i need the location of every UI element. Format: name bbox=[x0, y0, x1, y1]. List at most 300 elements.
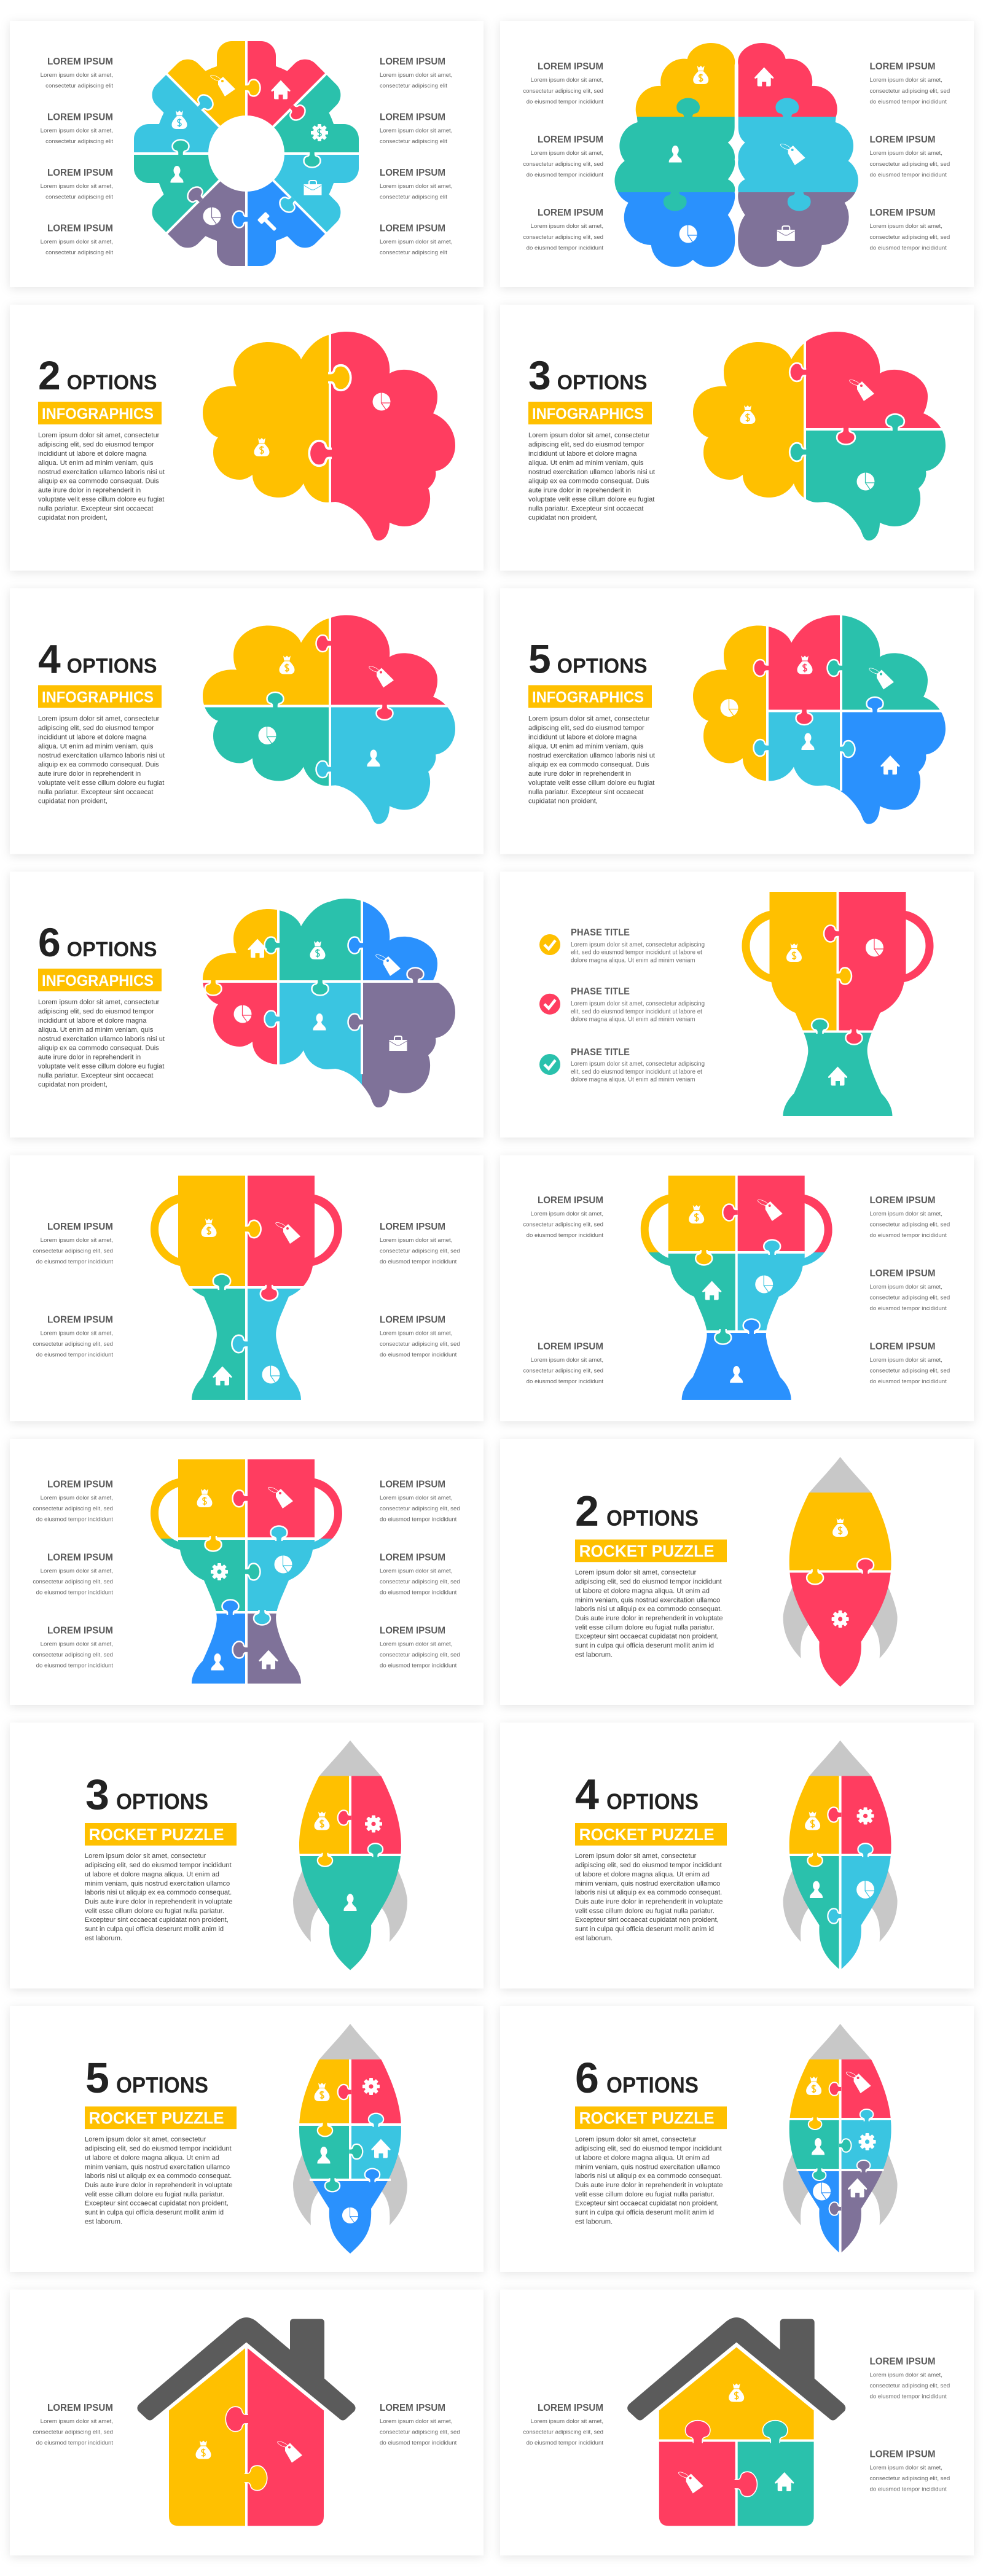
house diagram bbox=[627, 2317, 845, 2529]
left text column: LOREM IPSUM bbox=[538, 208, 603, 218]
left text column: consectetur adipiscing elit, sed bbox=[33, 1652, 113, 1658]
left text column: do eiusmod tempor incididunt bbox=[527, 1378, 603, 1385]
body text: velit esse cillum dolore eu fugiat nulla pariatur. bbox=[575, 1624, 715, 1631]
body text: adipiscing elit, sed do eiusmod tempor bbox=[528, 725, 644, 732]
trophy diagram bbox=[148, 1174, 345, 1404]
brain diagram bbox=[614, 43, 858, 267]
body text: aliqua. Ut enim ad minim veniam, quis bbox=[528, 459, 644, 467]
left text column: consectetur adipiscing elit bbox=[45, 138, 113, 145]
body text: Lorem ipsum dolor sit amet, consectetur bbox=[85, 2136, 206, 2144]
body text: nostrud exercitation ullamco laboris nisi ut bbox=[38, 752, 165, 759]
right text column: LOREM IPSUM bbox=[870, 208, 935, 218]
panel: two room house bbox=[10, 2290, 484, 2555]
left text column bbox=[523, 1195, 603, 1385]
left text column: LOREM IPSUM bbox=[538, 1195, 603, 1206]
body text: aute irure dolor in reprehenderit in bbox=[38, 486, 141, 494]
body text: minim veniam, quis nostrud exercitation ullamco bbox=[575, 1596, 720, 1604]
body text: nostrud exercitation ullamco laboris nisi ut bbox=[528, 752, 655, 759]
left text column: LOREM IPSUM bbox=[47, 168, 113, 178]
right text column: consectetur adipiscing elit bbox=[380, 83, 447, 90]
body text: est laborum. bbox=[85, 2218, 122, 2225]
right text column: consectetur adipiscing elit, sed bbox=[870, 234, 950, 241]
body text: aliquip ex ea commodo consequat. Duis bbox=[38, 478, 159, 485]
title: OPTIONS bbox=[67, 371, 157, 394]
phase three: dolore magna aliqua. Ut enim ad minim veniam bbox=[571, 1076, 695, 1083]
body text: laboris nisi ut aliquip ex ea commodo consequat. bbox=[575, 2172, 722, 2180]
right text blocks: do eiusmod tempor incididunt bbox=[870, 2393, 947, 2400]
brain diagram bbox=[194, 890, 466, 1117]
title: 6 bbox=[38, 919, 61, 965]
left text column: Lorem ipsum dolor sit amet, bbox=[531, 77, 603, 84]
body text: aliquip ex ea commodo consequat. Duis bbox=[528, 761, 649, 768]
title bbox=[528, 636, 648, 682]
card background bbox=[500, 2006, 974, 2272]
body text: adipiscing elit, sed do eiusmod tempor incididunt bbox=[575, 2145, 722, 2152]
left text column: do eiusmod tempor incididunt bbox=[527, 244, 603, 252]
body text: adipiscing elit, sed do eiusmod tempor bbox=[38, 1008, 154, 1015]
body text: aliquip ex ea commodo consequat. Duis bbox=[38, 1044, 159, 1052]
title bbox=[85, 2054, 208, 2102]
body text: adipiscing elit, sed do eiusmod tempor incididunt bbox=[85, 2145, 232, 2152]
body text: adipiscing elit, sed do eiusmod tempor incididunt bbox=[575, 1579, 722, 1586]
title: OPTIONS bbox=[557, 371, 648, 394]
body text: nulla pariatur. Excepteur sint occaecat bbox=[38, 1072, 153, 1080]
body text: nulla pariatur. Excepteur sint occaecat bbox=[528, 789, 643, 796]
body text: Duis aute irure dolor in reprehenderit in voluptate bbox=[85, 1898, 233, 1905]
right text column: do eiusmod tempor incididunt bbox=[870, 1305, 947, 1312]
left text column: LOREM IPSUM bbox=[47, 224, 113, 233]
left text block: do eiusmod tempor incididunt bbox=[36, 2440, 113, 2446]
right text column: Lorem ipsum dolor sit amet, bbox=[380, 127, 452, 134]
left text column: do eiusmod tempor incididunt bbox=[527, 1232, 603, 1239]
title bbox=[38, 919, 157, 965]
title: 4 bbox=[575, 1770, 599, 1818]
brain diagram bbox=[203, 615, 455, 824]
right text column: do eiusmod tempor incididunt bbox=[870, 172, 947, 178]
phase two: PHASE TITLE bbox=[571, 986, 630, 997]
title: OPTIONS bbox=[606, 1505, 699, 1531]
body text: aute irure dolor in reprehenderit in bbox=[38, 770, 141, 778]
body text: velit esse cillum dolore eu fugiat nulla pariatur. bbox=[575, 2191, 715, 2198]
left text block: LOREM IPSUM bbox=[538, 2403, 603, 2413]
left text column: consectetur adipiscing elit, sed bbox=[33, 1248, 113, 1255]
right text column: LOREM IPSUM bbox=[380, 1553, 445, 1563]
left text column: LOREM IPSUM bbox=[538, 1341, 603, 1352]
left text column: LOREM IPSUM bbox=[47, 1625, 113, 1636]
card background bbox=[10, 872, 484, 1138]
left text column: do eiusmod tempor incididunt bbox=[36, 1590, 113, 1596]
banner: ROCKET PUZZLE bbox=[89, 1825, 224, 1844]
right text column: consectetur adipiscing elit, sed bbox=[870, 88, 950, 95]
body text: aliqua. Ut enim ad minim veniam, quis bbox=[38, 743, 154, 751]
left text column: consectetur adipiscing elit, sed bbox=[523, 88, 603, 95]
right text blocks: consectetur adipiscing elit, sed bbox=[870, 2383, 950, 2389]
phase three: elit, sed do eiusmod tempor incididunt ut labore et bbox=[571, 1069, 702, 1075]
title: OPTIONS bbox=[67, 938, 157, 961]
banner: INFOGRAPHICS bbox=[42, 689, 154, 706]
right text column: do eiusmod tempor incididunt bbox=[380, 1590, 457, 1596]
left text column: Lorem ipsum dolor sit amet, bbox=[41, 238, 113, 246]
left text column: LOREM IPSUM bbox=[47, 1480, 113, 1490]
right text column: consectetur adipiscing elit, sed bbox=[380, 1248, 460, 1255]
body text bbox=[38, 432, 165, 521]
body text: Lorem ipsum dolor sit amet, consectetur bbox=[528, 432, 650, 439]
body text: Duis aute irure dolor in reprehenderit in voluptate bbox=[85, 2182, 233, 2189]
body text: nostrud exercitation ullamco laboris nisi ut bbox=[38, 1036, 165, 1043]
body text: cupidatat non proident, bbox=[528, 797, 598, 805]
left text column: Lorem ipsum dolor sit amet, bbox=[41, 72, 113, 79]
title: 5 bbox=[85, 2054, 109, 2102]
right text blocks: consectetur adipiscing elit, sed bbox=[870, 2475, 950, 2482]
right text column: do eiusmod tempor incididunt bbox=[870, 1232, 947, 1239]
left text column: do eiusmod tempor incididunt bbox=[36, 1662, 113, 1669]
title: 6 bbox=[575, 2054, 599, 2102]
left text column: consectetur adipiscing elit, sed bbox=[33, 1505, 113, 1512]
right text column: LOREM IPSUM bbox=[380, 112, 445, 122]
card background bbox=[500, 2290, 974, 2555]
panel: 3 options brain bbox=[500, 305, 974, 571]
banner: ROCKET PUZZLE bbox=[579, 2109, 715, 2128]
right text column: Lorem ipsum dolor sit amet, bbox=[870, 1284, 942, 1290]
right text block: LOREM IPSUM bbox=[380, 2403, 445, 2413]
right text column: Lorem ipsum dolor sit amet, bbox=[380, 1641, 452, 1647]
left text column: LOREM IPSUM bbox=[47, 1553, 113, 1563]
right text column: LOREM IPSUM bbox=[870, 1195, 935, 1206]
body text: Lorem ipsum dolor sit amet, consectetur bbox=[85, 1852, 206, 1860]
body text: ut labore et dolore magna aliqua. Ut enim ad bbox=[575, 1871, 710, 1878]
right text column: do eiusmod tempor incididunt bbox=[380, 1662, 457, 1669]
right text column: consectetur adipiscing elit, sed bbox=[870, 1367, 950, 1375]
title: OPTIONS bbox=[67, 655, 157, 678]
title: 2 bbox=[575, 1487, 599, 1535]
panel: 5 options brain bbox=[500, 588, 974, 854]
body text: adipiscing elit, sed do eiusmod tempor bbox=[38, 725, 154, 732]
body text: minim veniam, quis nostrud exercitation ullamco bbox=[85, 1880, 230, 1887]
banner: INFOGRAPHICS bbox=[532, 405, 644, 423]
right text column: do eiusmod tempor incididunt bbox=[870, 244, 947, 252]
left text column: LOREM IPSUM bbox=[47, 57, 113, 67]
left text column: do eiusmod tempor incididunt bbox=[36, 1516, 113, 1523]
right text column bbox=[380, 1222, 460, 1359]
title: 3 bbox=[528, 353, 551, 398]
right text column: LOREM IPSUM bbox=[870, 1341, 935, 1352]
left text block: LOREM IPSUM bbox=[47, 2403, 113, 2413]
phase two bbox=[539, 986, 705, 1023]
body text: nulla pariatur. Excepteur sint occaecat bbox=[38, 789, 153, 796]
right text column: consectetur adipiscing elit, sed bbox=[380, 1579, 460, 1585]
body text: incididunt ut labore et dolore magna bbox=[38, 733, 147, 741]
body text: nulla pariatur. Excepteur sint occaecat bbox=[528, 505, 643, 512]
left text column bbox=[41, 57, 113, 256]
body text: Lorem ipsum dolor sit amet, consectetur bbox=[575, 2136, 697, 2144]
left text column: LOREM IPSUM bbox=[47, 112, 113, 122]
right text column: LOREM IPSUM bbox=[380, 1222, 445, 1232]
right text column bbox=[870, 1195, 950, 1385]
body text: Excepteur sint occaecat cupidatat non proident, bbox=[575, 1916, 719, 1924]
right text column: consectetur adipiscing elit, sed bbox=[380, 1505, 460, 1512]
left text block: Lorem ipsum dolor sit amet, bbox=[531, 2418, 603, 2425]
left text column: Lorem ipsum dolor sit amet, bbox=[41, 183, 113, 190]
trophy diagram bbox=[148, 1458, 345, 1688]
left text column: do eiusmod tempor incididunt bbox=[36, 1259, 113, 1265]
left text block: Lorem ipsum dolor sit amet, bbox=[41, 2418, 113, 2425]
left text block: consectetur adipiscing elit, sed bbox=[523, 2429, 603, 2436]
body text: voluptate velit esse cillum dolore eu fugiat bbox=[528, 496, 654, 504]
body text: aliquip ex ea commodo consequat. Duis bbox=[528, 478, 649, 485]
body text: velit esse cillum dolore eu fugiat nulla pariatur. bbox=[85, 2191, 224, 2198]
body text: aliqua. Ut enim ad minim veniam, quis bbox=[38, 1026, 154, 1034]
body text: adipiscing elit, sed do eiusmod tempor incididunt bbox=[575, 1862, 722, 1869]
body text: sunt in culpa qui officia deserunt mollit anim id bbox=[85, 1926, 224, 1933]
left text column: Lorem ipsum dolor sit amet, bbox=[41, 1641, 113, 1647]
panel: 2 options rocket bbox=[500, 1439, 974, 1705]
body text: laboris nisi ut aliquip ex ea commodo consequat. bbox=[85, 2172, 232, 2180]
left text column: Lorem ipsum dolor sit amet, bbox=[531, 150, 603, 157]
right text column: Lorem ipsum dolor sit amet, bbox=[380, 72, 452, 79]
left text column: Lorem ipsum dolor sit amet, bbox=[531, 1357, 603, 1364]
right text column bbox=[380, 1480, 460, 1669]
right text column: LOREM IPSUM bbox=[870, 1268, 935, 1279]
body text: Excepteur sint occaecat cupidatat non proident, bbox=[85, 1916, 229, 1924]
body text: incididunt ut labore et dolore magna bbox=[528, 733, 637, 741]
left text column: do eiusmod tempor incididunt bbox=[527, 172, 603, 178]
rocket diagram bbox=[783, 2018, 898, 2256]
right text column: Lorem ipsum dolor sit amet, bbox=[870, 1357, 942, 1364]
right text column: Lorem ipsum dolor sit amet, bbox=[870, 150, 942, 157]
panel: three room house bbox=[500, 2290, 974, 2555]
left text column: consectetur adipiscing elit, sed bbox=[523, 1221, 603, 1228]
body text: voluptate velit esse cillum dolore eu fugiat bbox=[528, 779, 654, 787]
left text column bbox=[33, 1222, 113, 1359]
phase three: PHASE TITLE bbox=[571, 1047, 630, 1058]
body text: ut labore et dolore magna aliqua. Ut enim ad bbox=[85, 2154, 219, 2161]
body text: aliqua. Ut enim ad minim veniam, quis bbox=[528, 743, 644, 751]
body text: Duis aute irure dolor in reprehenderit in voluptate bbox=[575, 1615, 723, 1622]
right text column: Lorem ipsum dolor sit amet, bbox=[870, 223, 942, 230]
body text: nostrud exercitation ullamco laboris nisi ut bbox=[38, 469, 165, 476]
left text column: Lorem ipsum dolor sit amet, bbox=[41, 1330, 113, 1337]
body text: voluptate velit esse cillum dolore eu fugiat bbox=[38, 1063, 164, 1070]
title: 2 bbox=[38, 353, 61, 398]
body text: sunt in culpa qui officia deserunt mollit anim id bbox=[575, 2209, 714, 2216]
body text: voluptate velit esse cillum dolore eu fugiat bbox=[38, 496, 164, 504]
right text column: consectetur adipiscing elit, sed bbox=[870, 1221, 950, 1228]
left text column: consectetur adipiscing elit, sed bbox=[523, 161, 603, 168]
body text: incididunt ut labore et dolore magna bbox=[528, 450, 637, 458]
right text column: do eiusmod tempor incididunt bbox=[380, 1516, 457, 1523]
card background bbox=[500, 588, 974, 854]
body text: aute irure dolor in reprehenderit in bbox=[528, 486, 631, 494]
right text column: consectetur adipiscing elit bbox=[380, 249, 447, 256]
banner: INFOGRAPHICS bbox=[42, 972, 154, 989]
body text: aute irure dolor in reprehenderit in bbox=[38, 1054, 141, 1061]
body text: Lorem ipsum dolor sit amet, consectetur bbox=[38, 715, 160, 722]
left text block: consectetur adipiscing elit, sed bbox=[33, 2429, 113, 2436]
card background bbox=[10, 1722, 484, 1989]
card background bbox=[10, 1155, 484, 1421]
right text column: Lorem ipsum dolor sit amet, bbox=[380, 1567, 452, 1575]
left text block bbox=[33, 2403, 113, 2446]
card background bbox=[500, 1722, 974, 1989]
left text column: Lorem ipsum dolor sit amet, bbox=[41, 127, 113, 134]
right text column: LOREM IPSUM bbox=[380, 57, 445, 67]
card background bbox=[500, 1155, 974, 1421]
left text column: do eiusmod tempor incididunt bbox=[36, 1351, 113, 1359]
panel: 2 options brain bbox=[10, 305, 484, 571]
body text bbox=[575, 1852, 723, 1942]
left text column: LOREM IPSUM bbox=[47, 1222, 113, 1232]
left text column: consectetur adipiscing elit, sed bbox=[523, 1367, 603, 1375]
card background bbox=[10, 21, 484, 287]
rocket diagram bbox=[293, 1735, 407, 1974]
banner: ROCKET PUZZLE bbox=[579, 1825, 715, 1844]
body text bbox=[575, 2136, 723, 2225]
brain diagram bbox=[203, 332, 455, 541]
title bbox=[575, 1487, 699, 1535]
gear puzzle diagram bbox=[134, 41, 359, 266]
brain diagram bbox=[693, 615, 946, 824]
right text column: LOREM IPSUM bbox=[380, 1315, 445, 1325]
title: 3 bbox=[85, 1770, 109, 1818]
right text block bbox=[380, 2403, 460, 2446]
right text block: do eiusmod tempor incididunt bbox=[380, 2440, 457, 2446]
title: OPTIONS bbox=[116, 1789, 208, 1814]
right text column: do eiusmod tempor incididunt bbox=[380, 1259, 457, 1265]
right text column: Lorem ipsum dolor sit amet, bbox=[380, 1330, 452, 1337]
left text column: LOREM IPSUM bbox=[538, 135, 603, 145]
body text bbox=[38, 715, 165, 805]
body text: nostrud exercitation ullamco laboris nisi ut bbox=[528, 469, 655, 476]
body text: cupidatat non proident, bbox=[38, 1081, 108, 1088]
right text column: Lorem ipsum dolor sit amet, bbox=[380, 238, 452, 246]
body text: Duis aute irure dolor in reprehenderit in voluptate bbox=[575, 1898, 723, 1905]
card background bbox=[10, 305, 484, 571]
banner: ROCKET PUZZLE bbox=[579, 1542, 715, 1561]
body text bbox=[38, 999, 165, 1088]
right text blocks: LOREM IPSUM bbox=[870, 2356, 935, 2367]
left text block bbox=[523, 2403, 603, 2446]
body text bbox=[85, 1852, 233, 1942]
card background bbox=[10, 1439, 484, 1705]
body text bbox=[575, 1569, 723, 1658]
panel: 6 options brain bbox=[10, 872, 484, 1138]
banner: ROCKET PUZZLE bbox=[89, 2109, 224, 2128]
panel: 3 options rocket bbox=[10, 1722, 484, 1989]
body text: Lorem ipsum dolor sit amet, consectetur bbox=[38, 999, 160, 1006]
right text block: consectetur adipiscing elit, sed bbox=[380, 2429, 460, 2436]
phase three bbox=[539, 1047, 705, 1083]
body text: incididunt ut labore et dolore magna bbox=[38, 1017, 147, 1025]
trophy diagram bbox=[638, 1174, 835, 1404]
left text column bbox=[523, 61, 603, 252]
card background bbox=[10, 2006, 484, 2272]
panel: 4 options rocket bbox=[500, 1722, 974, 1989]
right text column: LOREM IPSUM bbox=[870, 135, 935, 145]
body text: Lorem ipsum dolor sit amet, consectetur bbox=[575, 1852, 697, 1860]
body text: velit esse cillum dolore eu fugiat nulla pariatur. bbox=[575, 1907, 715, 1914]
right text column: consectetur adipiscing elit bbox=[380, 194, 447, 201]
title: OPTIONS bbox=[116, 2072, 208, 2098]
right text column bbox=[870, 61, 950, 252]
left text column: LOREM IPSUM bbox=[47, 1315, 113, 1325]
trophy diagram bbox=[740, 890, 936, 1117]
body text bbox=[528, 715, 655, 805]
phase three: Lorem ipsum dolor sit amet, consectetur adipiscing bbox=[571, 1061, 705, 1067]
banner: INFOGRAPHICS bbox=[532, 689, 644, 706]
right text blocks: Lorem ipsum dolor sit amet, bbox=[870, 2372, 942, 2378]
title: OPTIONS bbox=[606, 1789, 699, 1814]
phase one: dolore magna aliqua. Ut enim ad minim veniam bbox=[571, 957, 695, 964]
body text: adipiscing elit, sed do eiusmod tempor bbox=[38, 441, 154, 448]
body text: aliqua. Ut enim ad minim veniam, quis bbox=[38, 459, 154, 467]
phase two: elit, sed do eiusmod tempor incididunt ut labore et bbox=[571, 1009, 702, 1015]
body text: Excepteur sint occaecat cupidatat non proident, bbox=[85, 2200, 229, 2207]
left text column: Lorem ipsum dolor sit amet, bbox=[531, 1211, 603, 1217]
right text blocks: do eiusmod tempor incididunt bbox=[870, 2486, 947, 2492]
right text column: LOREM IPSUM bbox=[380, 1625, 445, 1636]
left text block: do eiusmod tempor incididunt bbox=[527, 2440, 603, 2446]
body text: minim veniam, quis nostrud exercitation ullamco bbox=[575, 2163, 720, 2171]
card background bbox=[10, 2290, 484, 2555]
body text: aute irure dolor in reprehenderit in bbox=[528, 770, 631, 778]
left text column: consectetur adipiscing elit, sed bbox=[33, 1341, 113, 1348]
title bbox=[528, 353, 648, 398]
title: OPTIONS bbox=[557, 655, 648, 678]
right text column: Lorem ipsum dolor sit amet, bbox=[380, 1237, 452, 1244]
left text column: consectetur adipiscing elit bbox=[45, 83, 113, 90]
title bbox=[85, 1770, 208, 1818]
card background bbox=[500, 305, 974, 571]
right text column: LOREM IPSUM bbox=[870, 61, 935, 72]
card background bbox=[500, 21, 974, 287]
body text: nulla pariatur. Excepteur sint occaecat bbox=[38, 505, 153, 512]
left text column: Lorem ipsum dolor sit amet, bbox=[41, 1237, 113, 1244]
body text: adipiscing elit, sed do eiusmod tempor bbox=[528, 441, 644, 448]
right text column bbox=[380, 57, 452, 256]
brain diagram bbox=[693, 332, 946, 541]
right text blocks bbox=[870, 2356, 950, 2492]
phase two: Lorem ipsum dolor sit amet, consectetur adipiscing bbox=[571, 1001, 705, 1007]
body text: cupidatat non proident, bbox=[38, 514, 108, 521]
right text column: do eiusmod tempor incididunt bbox=[870, 1378, 947, 1385]
body text: Lorem ipsum dolor sit amet, consectetur bbox=[575, 1569, 697, 1577]
left text column: LOREM IPSUM bbox=[538, 61, 603, 72]
right text blocks: LOREM IPSUM bbox=[870, 2449, 935, 2459]
body text bbox=[85, 2136, 233, 2225]
body text: aliquip ex ea commodo consequat. Duis bbox=[38, 761, 159, 768]
body text: voluptate velit esse cillum dolore eu fugiat bbox=[38, 779, 164, 787]
body text: Lorem ipsum dolor sit amet, consectetur bbox=[528, 715, 650, 722]
phase one: elit, sed do eiusmod tempor incididunt ut labore et bbox=[571, 950, 702, 956]
right text column: Lorem ipsum dolor sit amet, bbox=[380, 183, 452, 190]
title bbox=[38, 636, 157, 682]
right text block: Lorem ipsum dolor sit amet, bbox=[380, 2418, 452, 2425]
body text: minim veniam, quis nostrud exercitation ullamco bbox=[575, 1880, 720, 1887]
right text column: consectetur adipiscing elit, sed bbox=[380, 1652, 460, 1658]
house diagram bbox=[137, 2317, 356, 2529]
body text: adipiscing elit, sed do eiusmod tempor incididunt bbox=[85, 1862, 232, 1869]
panel: phase titles trophy bbox=[500, 872, 974, 1138]
right text column: Lorem ipsum dolor sit amet, bbox=[380, 1495, 452, 1501]
body text: est laborum. bbox=[575, 1935, 613, 1942]
left text column: consectetur adipiscing elit, sed bbox=[523, 234, 603, 241]
body text: cupidatat non proident, bbox=[38, 797, 108, 805]
panel: 5 options rocket bbox=[10, 2006, 484, 2272]
rocket diagram bbox=[293, 2018, 407, 2257]
card background bbox=[10, 588, 484, 854]
panel: front view brain puzzle bbox=[500, 21, 974, 287]
right text column: consectetur adipiscing elit, sed bbox=[380, 1341, 460, 1348]
